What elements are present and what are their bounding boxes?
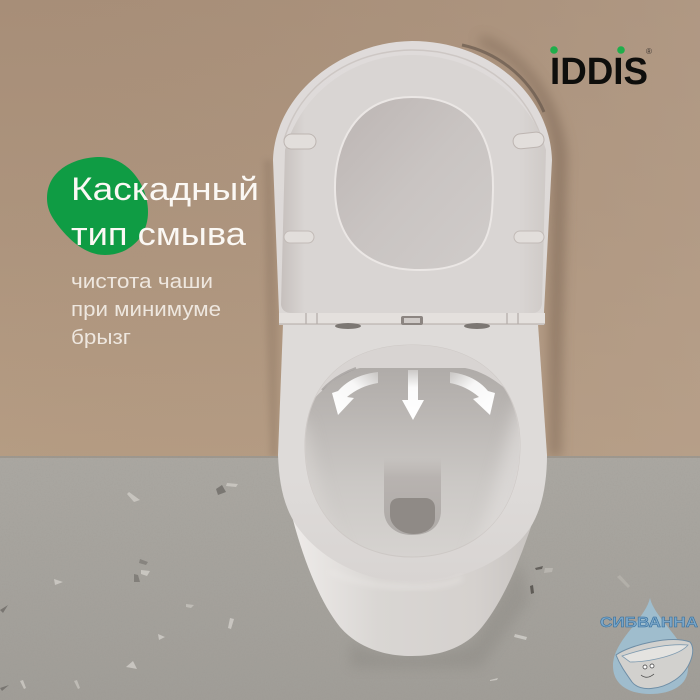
ceramic body [293,515,535,656]
lid outer rib [284,50,542,140]
IDDIS logo: ® [646,47,652,56]
subheading: брызг [71,327,131,349]
peg upper right [512,131,545,150]
water hole [390,498,435,534]
subheading [71,271,221,349]
lid recess [281,55,546,313]
arrow left [332,372,378,415]
green blob [47,157,148,255]
trapway [384,458,441,535]
heading [71,171,259,252]
bowl interior [304,344,520,558]
arrow center [402,370,424,420]
IDDIS logo: IDDIS [550,51,648,93]
peg lower right [514,231,544,243]
water drop [613,598,688,694]
toilet seat lid [273,41,552,329]
subheading: чистота чаши [71,271,213,293]
peg upper left [284,134,316,149]
terrazzo floor [0,456,700,700]
subheading: при минимуме [71,299,221,321]
peg lower left [284,231,314,243]
flush shelf under the rim [316,345,504,396]
lid outer shell [273,41,552,325]
side glow [482,408,520,534]
bathtub [616,640,693,689]
back ring shadow edge [462,45,544,112]
Sibvanna watermark [600,598,698,694]
watermark text: СИБВАННА [600,614,698,631]
heading: Каскадный [71,171,259,207]
hinge strip [279,313,545,329]
floor contact shadow [350,560,530,668]
arrow right [450,372,495,415]
heading: тип смыва [71,216,246,252]
toilet bowl [278,324,547,668]
flush arrows [332,370,495,420]
dark rim shadow left [322,368,356,390]
rim top surface [278,324,547,583]
rim highlight [330,572,462,587]
wall background [0,0,700,457]
seat opening [335,97,493,270]
